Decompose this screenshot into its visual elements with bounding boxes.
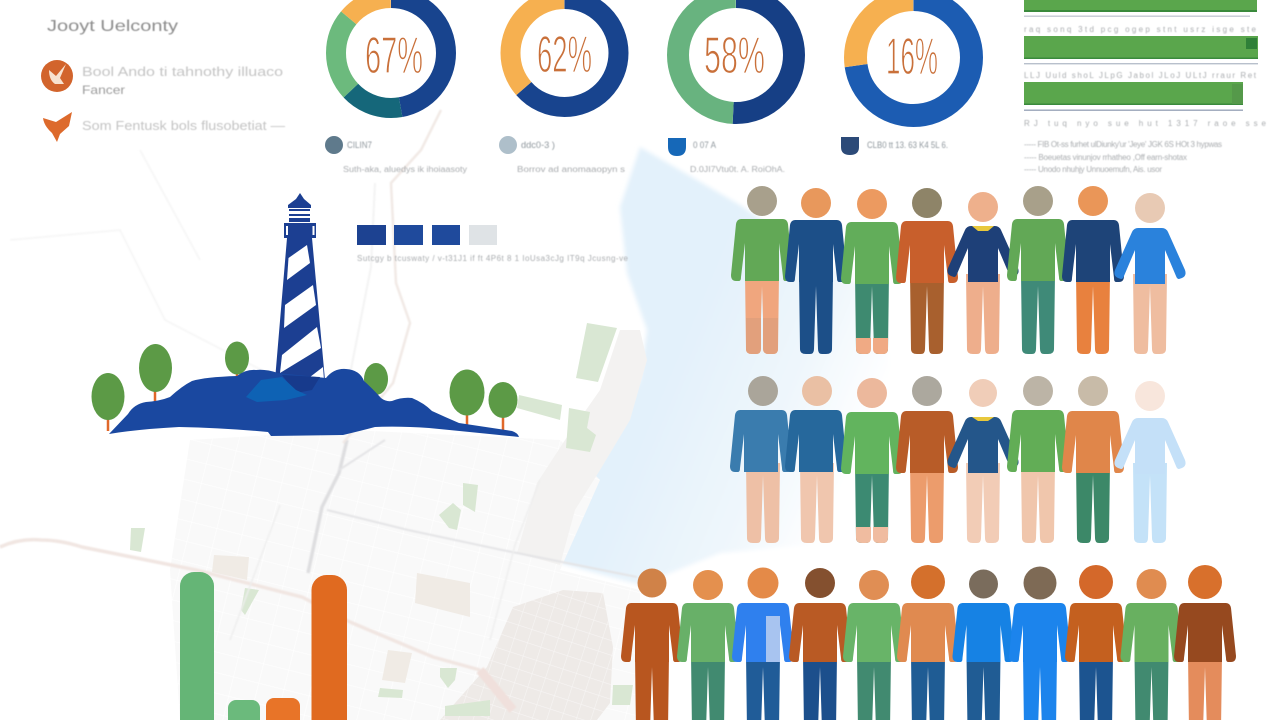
parks: [130, 323, 633, 716]
value 67%: 67%: [365, 27, 423, 85]
person: [785, 188, 847, 354]
value 62%: 62%: [537, 26, 592, 84]
person: [1007, 376, 1069, 543]
person: [732, 568, 794, 720]
legend item one: Suth-aka, aluedys ik ihoiaasoty: [343, 165, 467, 174]
donut chart 16%: 16%: [886, 28, 938, 86]
person: [1009, 566, 1071, 720]
lighthouse on island: [92, 193, 519, 437]
progress bars: [1024, 0, 1267, 174]
person: [677, 570, 739, 720]
bar three: RJ tuq nyo sue hut 1317 raoe sse: [1024, 119, 1267, 128]
legend item one: [325, 136, 467, 174]
person: [1120, 569, 1182, 720]
text block: first item: Fancer: [82, 83, 125, 97]
heading: Jooyt Uelconty: [47, 18, 178, 35]
person: [947, 192, 1019, 354]
person: [947, 379, 1019, 543]
donut chart 16%: [856, 0, 972, 116]
person: [621, 568, 683, 720]
orange short bar: [266, 698, 300, 720]
lagoon: [246, 377, 307, 402]
bar notes: ----- Unodo nhuhjy Unnuoemufn, Ais. usor: [1024, 165, 1162, 174]
person: [1007, 186, 1069, 354]
legend item four: CLB0 tt 13. 63 K4 5L 6.: [867, 140, 948, 150]
person: [1114, 193, 1186, 354]
bar notes: [1024, 140, 1222, 174]
tower base shadow: [282, 375, 320, 393]
person: [843, 570, 905, 720]
people row one: [731, 186, 1186, 354]
dense urban area: [440, 590, 613, 720]
value 58%: 58%: [704, 27, 765, 85]
legend item one: CILIN7: [347, 140, 372, 150]
icon: trees: [92, 342, 518, 420]
green tall bar: [180, 572, 214, 720]
legend item four: [841, 137, 948, 155]
person: [785, 376, 847, 543]
people row three: [621, 565, 1236, 720]
person: [730, 376, 792, 543]
water area: [560, 147, 900, 585]
person: [841, 189, 903, 354]
bar notes: ----- FIB Ot-ss furhet ulDiunky'ur 'Jeye' JGK 6S HOt 3 hypwas: [1024, 140, 1222, 149]
caption: Sutcgy b tcuswaty / v-t31J1 if ft 4P6t 8 1 IoUsa3cJg IT9q Jcusng-ve: [357, 254, 629, 263]
person: [1114, 381, 1186, 543]
map background: [0, 110, 900, 720]
people row two: [730, 376, 1186, 543]
person: [789, 568, 851, 720]
donut chart 58%: [678, 0, 794, 113]
orange tall bar: [312, 575, 347, 720]
legend item two: Borrov ad anomaaopyn s: [517, 165, 625, 174]
roads: [0, 110, 637, 710]
legend item two: ddc0-3 ): [521, 140, 555, 150]
person: [952, 570, 1014, 720]
person: [896, 188, 958, 354]
person: [1065, 565, 1127, 720]
street grid: [170, 430, 640, 720]
donut legends: [325, 136, 948, 174]
legend item three: [668, 138, 785, 174]
text block: second item: Som Fentusk bols flusobetiat —: [82, 118, 285, 133]
waterfront blocks: [517, 330, 647, 565]
bar two: LLJ Uuld shoL JLpG Jabol JLoJ ULtJ rraur Ret: [1024, 71, 1257, 80]
island: [109, 369, 519, 437]
bar one: raq sonq 3td pcg ogep stnt usrz isge ste: [1024, 25, 1257, 34]
text block: first item: Bool Ando ti tahnothy illuaco: [82, 64, 283, 79]
bar two: [1024, 36, 1258, 80]
person: [731, 186, 793, 354]
tree trunks: [108, 374, 503, 431]
bar three: [1024, 82, 1267, 128]
person: [841, 378, 903, 543]
person: [1062, 186, 1124, 354]
green short bar: [228, 700, 260, 720]
bar chart: [180, 572, 347, 720]
person: [897, 565, 959, 720]
icon: orange fox: [43, 112, 72, 142]
legend item three: 0 07 A: [693, 140, 716, 150]
person: [1174, 565, 1236, 720]
bar one: [1024, 0, 1257, 34]
bar notes: ----- Boeuetas vinunjov rrhatheo ,Off earn-shotax: [1024, 153, 1187, 162]
icon: orange circle: [41, 60, 73, 92]
icon: lighthouse: [275, 193, 325, 382]
donut chart 67%: [336, 0, 446, 108]
beige blocks: [212, 555, 470, 683]
person: [1062, 376, 1124, 543]
donut chart 62%: [510, 0, 618, 107]
legend item three: D.0JI7Vtu0t. A. RoiOhA.: [690, 165, 785, 174]
person: [896, 376, 958, 543]
text block: first item: [82, 64, 283, 97]
header block: [41, 18, 285, 142]
legend item two: [499, 136, 625, 174]
bar legend squares: [357, 225, 629, 263]
